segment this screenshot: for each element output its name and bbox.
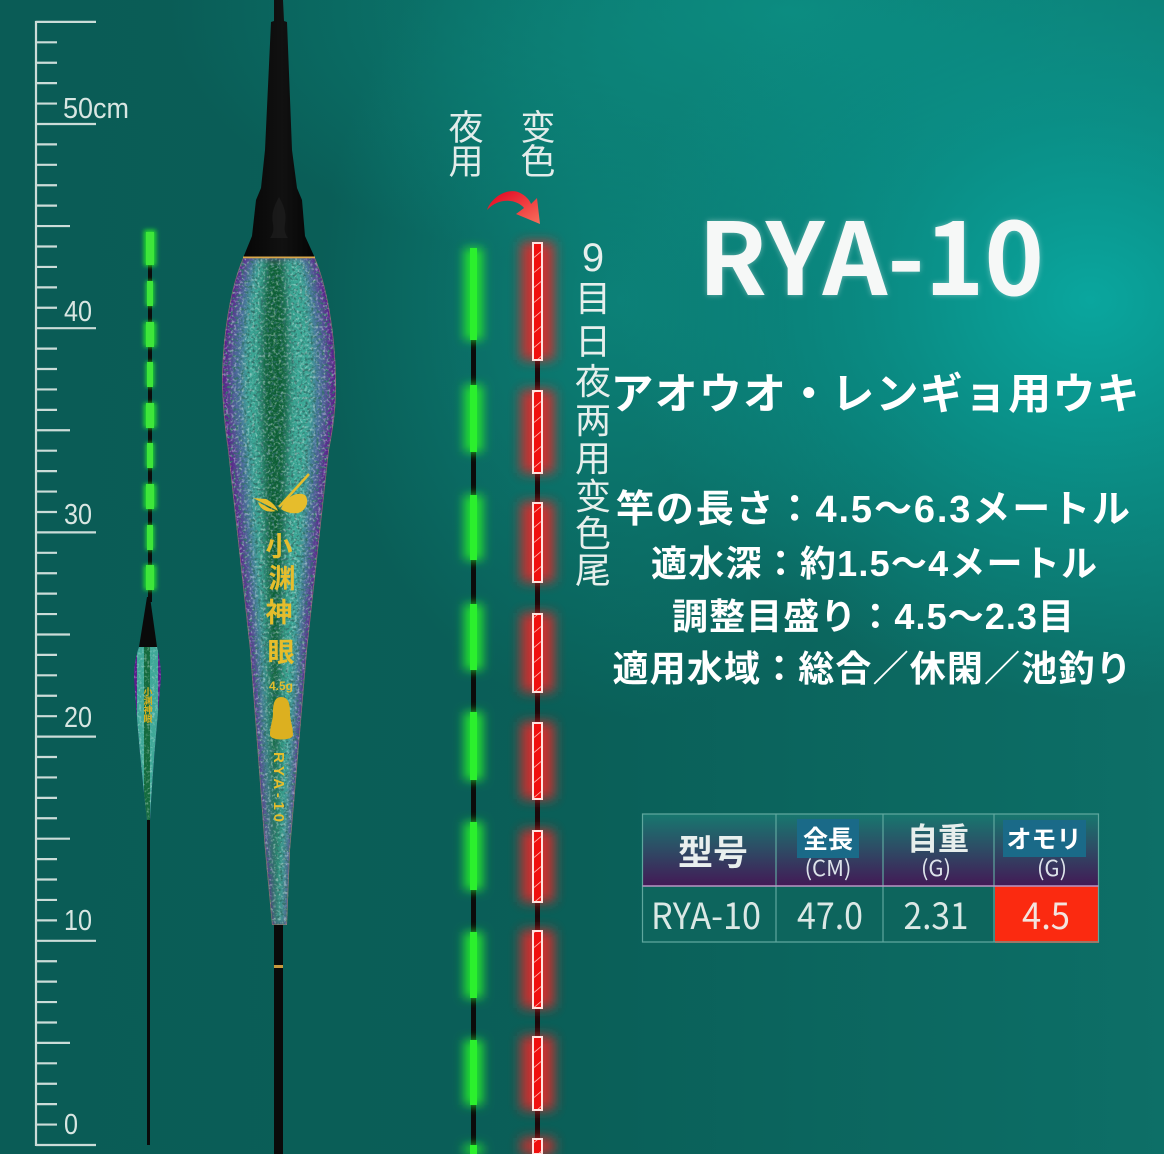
value: weight: 2.31 [904,888,968,940]
header: total length: 全長 [803,820,853,856]
night use heading [448,109,484,182]
gold butterfly logo [253,474,309,513]
gold brand lettering [266,532,296,668]
night use heading: 用 [448,143,484,182]
gold ring [243,256,315,259]
spec: rod length: 竿の長さ：4.5～6.3メートル [616,489,1130,531]
ruler label: 40: 40 [64,296,92,328]
weight value cell [995,886,1099,943]
spec table [642,814,1099,943]
red colour-change tail [521,242,554,1154]
night use heading: 夜 [448,109,484,148]
spec: water type: 適用水域：総合／休閑／池釣り [612,648,1132,689]
unit: g sinker: (G) [1037,851,1067,883]
title glow: RYA-10 [698,179,1044,324]
table header band [642,814,1098,886]
large float close-up [222,0,336,1154]
vertical caption: 夜 [575,361,611,402]
gold brand lettering: 渊 [268,564,296,594]
ruler label: 20: 20 [64,702,92,734]
vertical caption: 日 [575,321,611,362]
spec: adjustment marks: 調整目盛り：4.5～2.3目 [672,596,1074,637]
ruler label: 10: 10 [64,905,92,937]
ruler label: 50cm: 50cm [63,93,129,125]
gold emblem [270,697,293,740]
vertical caption: 9 [582,236,604,280]
vertical caption: 用 [575,438,611,479]
header: own weight: 自重 [907,814,969,859]
green night tail [464,248,483,1154]
gold brand lettering: 眼 [268,638,294,668]
small float lettering: 小渊神眼 [142,686,154,724]
gold brand lettering: 小 [266,532,292,562]
arrow: night to colour change [487,191,540,224]
header: sinker: オモリ [1006,820,1082,856]
collar highlight [270,197,288,238]
stem gold band [274,965,283,968]
vertical caption: 色 [575,513,611,554]
spec list [612,489,1132,689]
gold brand lettering: 神 [266,598,292,628]
value: sinker: 4.5 [1022,888,1070,940]
unit: cm: (CM) [805,851,851,883]
small float body [134,647,161,820]
iridescent body [222,258,336,925]
unit: g: (G) [921,851,951,883]
gold model mark: RYA-10 [270,752,287,822]
vertical caption: 目 [575,278,611,319]
ruler label: 0: 0 [64,1109,78,1141]
vertical caption: 变 [575,476,611,517]
colour change heading: 变 [520,109,556,148]
title: RYA-10 [698,179,1044,324]
header: model: 型号 [678,825,748,876]
ruler [36,21,129,1146]
small float line [147,820,150,1145]
table body band [642,886,1098,942]
colour change heading [520,109,556,182]
vertical caption: 尾 [575,550,611,591]
value: length: 47.0 [797,888,863,940]
gold weight mark: 4.5g [269,679,293,693]
vertical caption: 两 [575,400,611,441]
ruler label: 30: 30 [64,499,92,531]
black stem [274,925,283,1154]
value: model: RYA-10 [651,888,761,940]
black antenna and collar [243,0,315,258]
colour change heading: 色 [520,143,556,182]
small float at scale [134,226,161,1145]
small float tail [144,230,156,602]
spec: water depth: 適水深：約1.5～4メートル [651,543,1097,584]
subtitle: アオウオ・レンギョ用ウキ [610,360,1140,422]
vertical caption [575,236,611,591]
small float cone [139,597,157,647]
